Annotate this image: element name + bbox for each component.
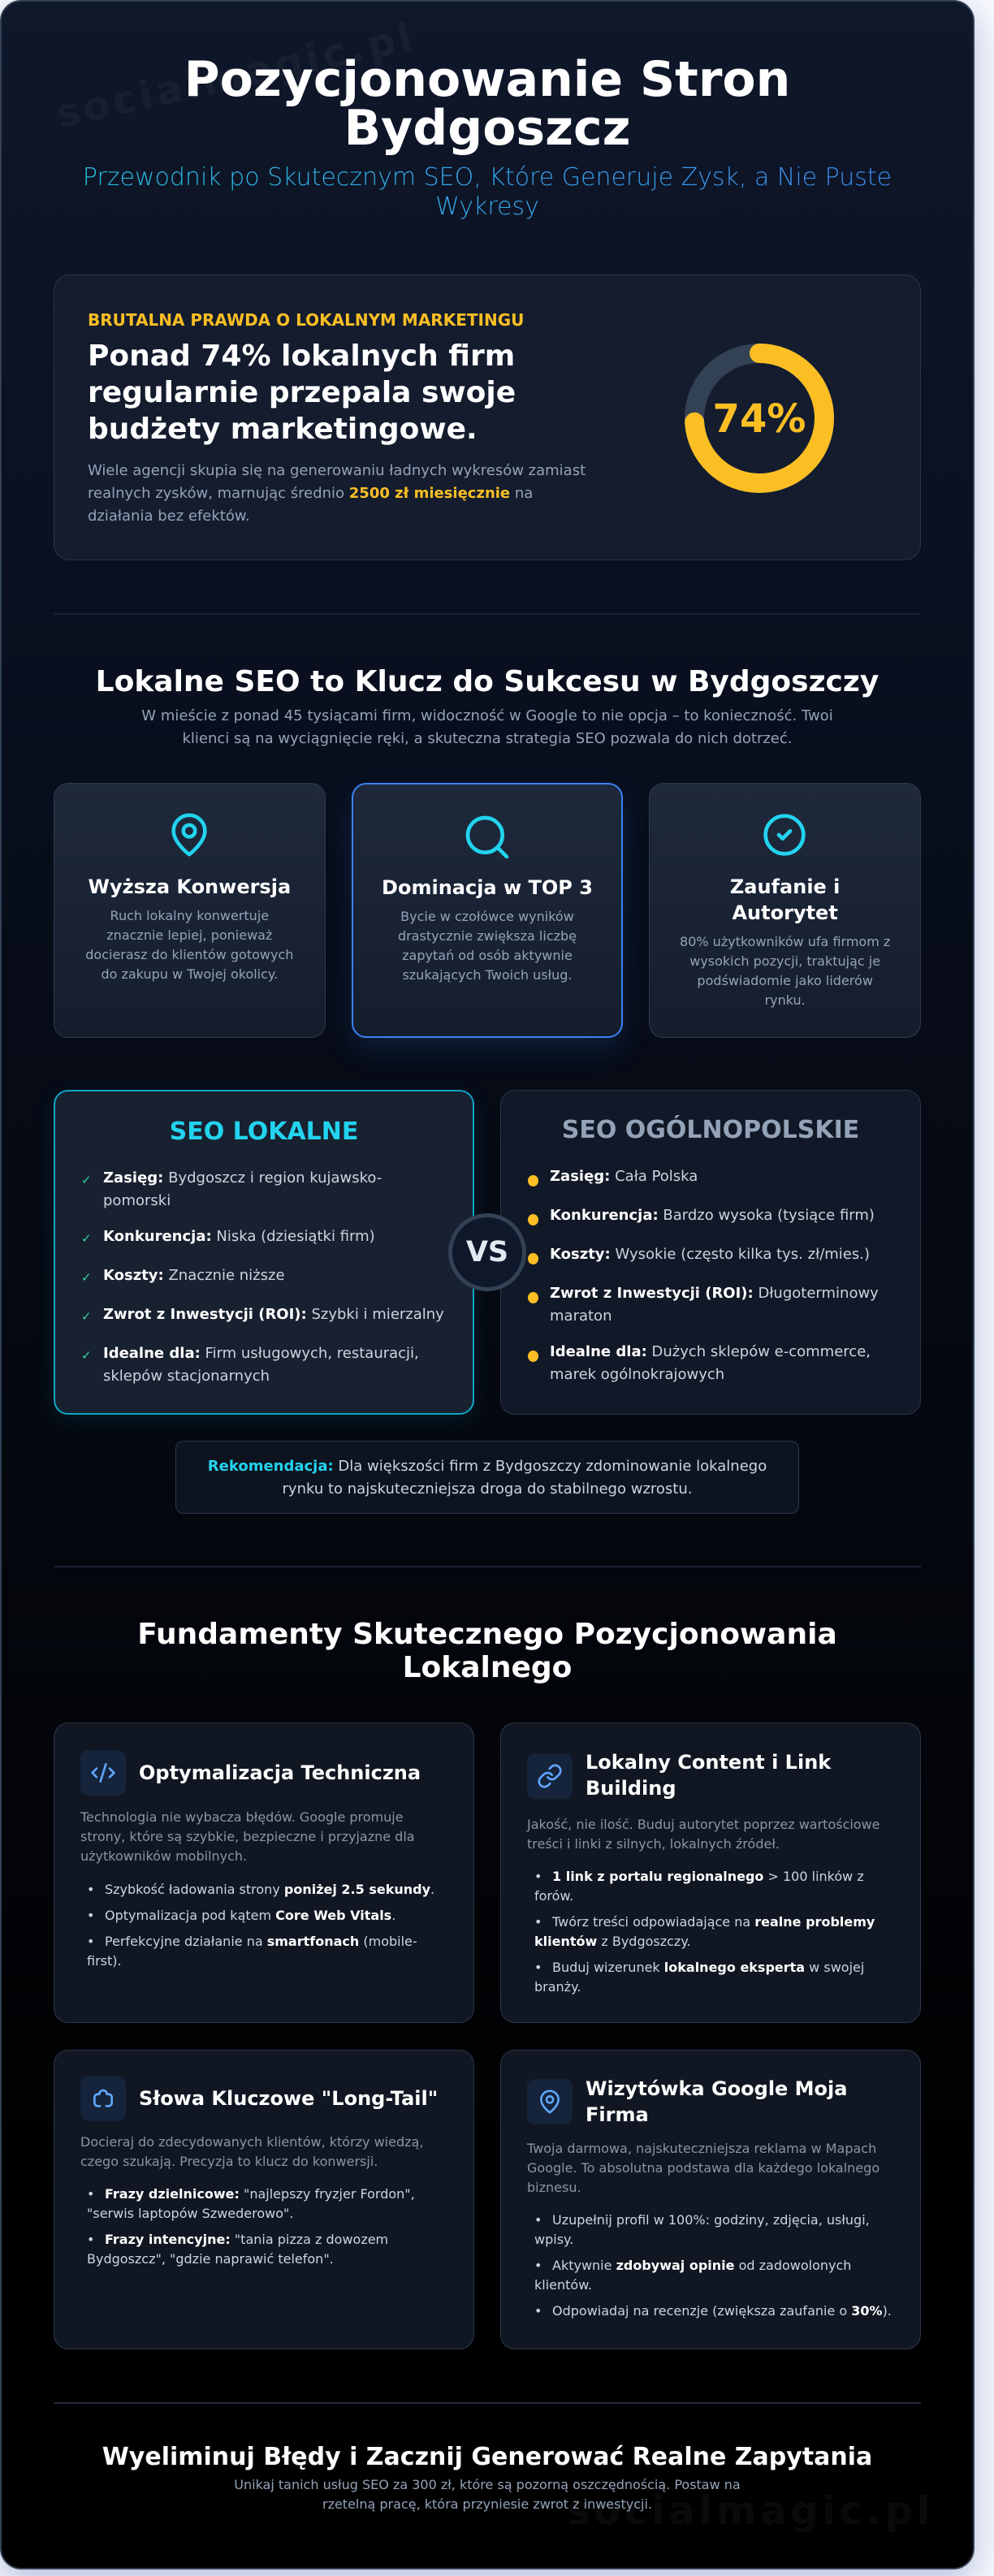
title: Pozycjonowanie Stron bbox=[184, 51, 790, 108]
card list: Uzupełnij profil w 100%: godziny, zdjęcia, usługi, bbox=[552, 2212, 870, 2228]
comparison list: Zwrot z Inwestycji (ROI): Długoterminowy bbox=[550, 1285, 879, 1302]
card list item: klientów z Bydgoszczy. bbox=[534, 1934, 691, 1949]
section intro bbox=[141, 707, 833, 747]
panel: technical optimization bbox=[54, 1722, 474, 2023]
hero text: działania bez efektów. bbox=[88, 508, 250, 525]
card text: Jakość, nie ilość. Buduj autorytet poprzez wartościowe bbox=[527, 1817, 880, 1832]
section intro: W mieście z ponad 45 tysiącami firm, widoczność w Google to nie opcja – to konieczność. Twoi bbox=[141, 707, 833, 724]
card title: Dominacja w TOP 3 bbox=[382, 876, 593, 899]
card list: Szybkość ładowania strony poniżej 2.5 sekundy. bbox=[105, 1882, 434, 1897]
card list item bbox=[534, 1960, 864, 1995]
card list: • bbox=[534, 1869, 542, 1884]
comparison heading: SEO OGÓLNOPOLSKIE bbox=[562, 1116, 859, 1144]
card list: forów. bbox=[534, 1888, 573, 1904]
card title bbox=[730, 875, 840, 924]
comparison heading: SEO LOKALNE bbox=[170, 1117, 358, 1146]
card list item: • bbox=[534, 1914, 542, 1930]
card text: Twoja darmowa, najskuteczniejsza reklama w Mapach bbox=[527, 2141, 876, 2156]
comparison list bbox=[81, 1169, 444, 1385]
panel: top 3 dominance bbox=[352, 783, 623, 1038]
comparison list: Konkurencja: Niska (dziesiątki firm) bbox=[103, 1228, 375, 1245]
card text: zapytań od osób aktywnie bbox=[402, 948, 573, 963]
icon: keyword tag bbox=[80, 2076, 126, 2121]
card title: Firma bbox=[586, 2103, 649, 2126]
comparison list bbox=[528, 1168, 879, 1383]
card text: Google. To absolutna podstawa dla każdego lokalnego bbox=[527, 2160, 879, 2176]
card text: wysokich pozycji, traktując je bbox=[689, 953, 880, 969]
card text bbox=[85, 908, 293, 982]
callout: recommendation: rynku to najskuteczniejsza droga do stabilnego wzrostu. bbox=[283, 1480, 692, 1498]
card list item bbox=[87, 2232, 388, 2267]
comparison list: Konkurencja: Bardzo wysoka (tysiące firm) bbox=[550, 1207, 875, 1224]
subtitle bbox=[83, 163, 892, 221]
card list item: • bbox=[87, 1934, 94, 1949]
comparison list: Koszty: Wysokie (często kilka tys. zł/mies.) bbox=[550, 1246, 870, 1263]
card title: Wizytówka Google Moja bbox=[586, 2077, 847, 2100]
card title: Autorytet bbox=[732, 901, 838, 924]
card text: czego szukają. Precyzja to klucz do konwersji. bbox=[80, 2154, 378, 2169]
card list bbox=[534, 2212, 870, 2247]
card list item: Odpowiadaj na recenzje (zwiększa zaufanie o 30%). bbox=[552, 2303, 892, 2319]
panel: Google Business Profile bbox=[500, 2050, 921, 2349]
footer text: rzetelną pracę, która przyniesie zwrot z inwestycji. bbox=[322, 2496, 652, 2512]
card text: drastycznie zwiększa liczbę bbox=[398, 928, 577, 944]
panel: nationwide SEO comparison bbox=[500, 1090, 921, 1415]
callout: recommendation bbox=[175, 1441, 799, 1514]
title bbox=[184, 51, 790, 157]
section heading: foundations bbox=[137, 1618, 837, 1684]
comparison list: Idealne dla: Firm usługowych, restauracji, bbox=[103, 1345, 419, 1362]
icon: map pin bbox=[527, 2079, 573, 2124]
comparison list: Zasięg: Bydgoszcz i region kujawsko- bbox=[103, 1169, 382, 1186]
card list item: Frazy intencyjne: "tania pizza z dowozem bbox=[105, 2232, 388, 2247]
watermark top: socialmagic.pl bbox=[52, 14, 420, 137]
icon: map pin bbox=[171, 814, 207, 856]
hero text: realnych zysków, marnując średnio 2500 zł miesięcznie na bbox=[88, 485, 533, 502]
title: Bydgoszcz bbox=[344, 100, 631, 157]
card text: strony, które są szybkie, bezpieczne i przyjazne dla bbox=[80, 1829, 415, 1844]
card list bbox=[534, 1869, 864, 1904]
card list item: • bbox=[87, 2232, 94, 2247]
card text: znacznie lepiej, ponieważ bbox=[106, 927, 272, 943]
card text: 80% użytkowników ufa firmom z bbox=[680, 934, 890, 949]
panel: trust and authority bbox=[649, 783, 921, 1038]
card list item bbox=[87, 1934, 417, 1969]
card text: użytkowników mobilnych. bbox=[80, 1848, 247, 1864]
card text bbox=[526, 1817, 880, 1852]
comparison list: Zwrot z Inwestycji (ROI): Szybki i mierzalny bbox=[103, 1306, 444, 1323]
card list bbox=[87, 2186, 415, 2221]
card list item bbox=[534, 2258, 851, 2293]
panel: long-tail keywords bbox=[54, 2050, 474, 2349]
card text: Docieraj do zdecydowanych klientów, którzy wiedzą, bbox=[80, 2134, 423, 2150]
card text: rynku. bbox=[765, 992, 806, 1008]
panel: local content and links bbox=[500, 1722, 921, 2023]
card text: podświadomie jako liderów bbox=[697, 973, 873, 988]
hero heading: regularnie przepala swoje bbox=[88, 376, 516, 409]
card text bbox=[80, 2134, 423, 2169]
icon: check circle bbox=[763, 814, 806, 856]
comparison list: maraton bbox=[550, 1307, 612, 1325]
section heading: foundations: Fundamenty Skutecznego Pozycjonowania bbox=[137, 1618, 837, 1651]
section heading: foundations: Lokalnego bbox=[403, 1651, 572, 1684]
panel: local SEO comparison bbox=[54, 1090, 474, 1415]
card list item: • bbox=[534, 2303, 542, 2319]
card title: Optymalizacja Techniczna bbox=[139, 1761, 421, 1784]
VS badge bbox=[448, 1213, 526, 1291]
card list item: Bydgoszcz", "gdzie naprawić telefon". bbox=[87, 2251, 334, 2267]
card text: Bycie w czołówce wyników bbox=[400, 909, 574, 924]
card list item: • bbox=[534, 2258, 542, 2273]
subtitle: Przewodnik po Skutecznym SEO, Które Generuje Zysk, a Nie Puste bbox=[83, 163, 892, 192]
hero tag: BRUTALNA PRAWDA O LOKALNYM MARKETINGU bbox=[88, 310, 524, 330]
card text: biznesu. bbox=[527, 2180, 581, 2195]
card list item: Buduj wizerunek lokalnego eksperta w swojej bbox=[552, 1960, 864, 1975]
panel: higher conversion bbox=[54, 783, 326, 1038]
comparison list: Idealne dla: Dużych sklepów e-commerce, bbox=[550, 1343, 871, 1360]
comparison list: ✓ bbox=[81, 1348, 92, 1363]
card list item: Optymalizacja pod kątem Core Web Vitals. bbox=[105, 1908, 395, 1923]
card title: Słowa Kluczowe "Long-Tail" bbox=[139, 2087, 438, 2110]
hero text bbox=[88, 462, 586, 525]
donut chart: 74%: 74% bbox=[713, 396, 806, 442]
card list: 1 link z portalu regionalnego > 100 linków z bbox=[552, 1869, 864, 1884]
card list item: klientów. bbox=[534, 2277, 592, 2293]
card text: docierasz do klientów gotowych bbox=[85, 947, 293, 962]
card list: • bbox=[534, 2212, 542, 2228]
card title bbox=[586, 1751, 832, 1800]
panel: hero statistic bbox=[54, 274, 921, 560]
card list: • bbox=[87, 2186, 94, 2202]
card list item: • bbox=[87, 1908, 94, 1923]
card text: Ruch lokalny konwertuje bbox=[110, 908, 269, 923]
VS badge: VS bbox=[466, 1236, 508, 1269]
card list item: Twórz treści odpowiadające na realne problemy bbox=[552, 1914, 875, 1930]
comparison list: Zasięg: Cała Polska bbox=[550, 1168, 698, 1185]
card title: Building bbox=[586, 1777, 676, 1800]
card text: treści i linki z silnych, lokalnych źródeł. bbox=[527, 1836, 780, 1852]
card text bbox=[680, 934, 890, 1008]
card text: do zakupu w Twojej okolicy. bbox=[101, 966, 278, 982]
section heading: local SEO: Lokalne SEO to Klucz do Sukcesu w Bydgoszczy bbox=[96, 665, 879, 698]
icon: link bbox=[527, 1753, 573, 1799]
comparison list: ✓ bbox=[81, 1270, 92, 1285]
card list item: • bbox=[534, 1960, 542, 1975]
watermark bottom: socialmagic.pl bbox=[567, 2488, 934, 2534]
card title: Wyższa Konwersja bbox=[88, 875, 291, 898]
card text: Technologia nie wybacza błędów. Google promuje bbox=[80, 1809, 404, 1825]
icon: search bbox=[466, 815, 508, 859]
card title bbox=[586, 2077, 847, 2126]
comparison list: ✓ bbox=[81, 1231, 92, 1246]
subtitle: Wykresy bbox=[435, 192, 539, 221]
card list: • bbox=[87, 1882, 94, 1897]
hero heading: budżety marketingowe. bbox=[88, 413, 478, 446]
footer text bbox=[234, 2477, 741, 2512]
card title: Lokalny Content i Link bbox=[586, 1751, 831, 1774]
card text: szukających Twoich usług. bbox=[402, 967, 573, 983]
icon: code bbox=[80, 1750, 126, 1796]
card list: Frazy dzielnicowe: "najlepszy fryzjer Fordon", bbox=[105, 2186, 415, 2202]
hero heading bbox=[88, 339, 516, 446]
card text bbox=[526, 2141, 879, 2195]
callout: recommendation: Rekomendacja: Dla większości firm z Bydgoszczy zdominowanie lokalnego bbox=[208, 1458, 767, 1475]
comparison list: pomorski bbox=[103, 1192, 171, 1209]
comparison list: marek ogólnokrajowych bbox=[550, 1366, 724, 1383]
card list item: Aktywnie zdobywaj opinie od zadowolonych bbox=[552, 2258, 851, 2273]
footer text: Unikaj tanich usług SEO za 300 zł, które są pozorną oszczędnością. Postaw na bbox=[234, 2477, 741, 2492]
card list item bbox=[534, 1914, 875, 1949]
donut chart: 74% bbox=[685, 344, 834, 493]
card list item: branży. bbox=[534, 1979, 581, 1995]
comparison list: Koszty: Znacznie niższe bbox=[103, 1267, 285, 1284]
comparison list: ✓ bbox=[81, 1173, 92, 1187]
card list item: Perfekcyjne działanie na smartfonach (mobile- bbox=[105, 1934, 417, 1949]
hero heading: Ponad 74% lokalnych firm bbox=[88, 339, 515, 373]
card text bbox=[398, 909, 577, 983]
comparison list: ✓ bbox=[81, 1309, 92, 1324]
card list: "serwis laptopów Szwederowo". bbox=[87, 2206, 293, 2221]
card list: wpisy. bbox=[534, 2232, 573, 2247]
section intro: klienci są na wyciągnięcie ręki, a skuteczna strategia SEO pozwala do nich dotrzeć. bbox=[182, 730, 793, 747]
comparison list: sklepów stacjonarnych bbox=[103, 1368, 270, 1385]
card text bbox=[80, 1809, 415, 1864]
card list item: first). bbox=[87, 1953, 122, 1969]
card title: Zaufanie i bbox=[730, 875, 840, 898]
hero text: Wiele agencji skupia się na generowaniu ładnych wykresów zamiast bbox=[88, 462, 586, 479]
footer heading: Wyeliminuj Błędy i Zacznij Generować Realne Zapytania bbox=[102, 2443, 872, 2471]
